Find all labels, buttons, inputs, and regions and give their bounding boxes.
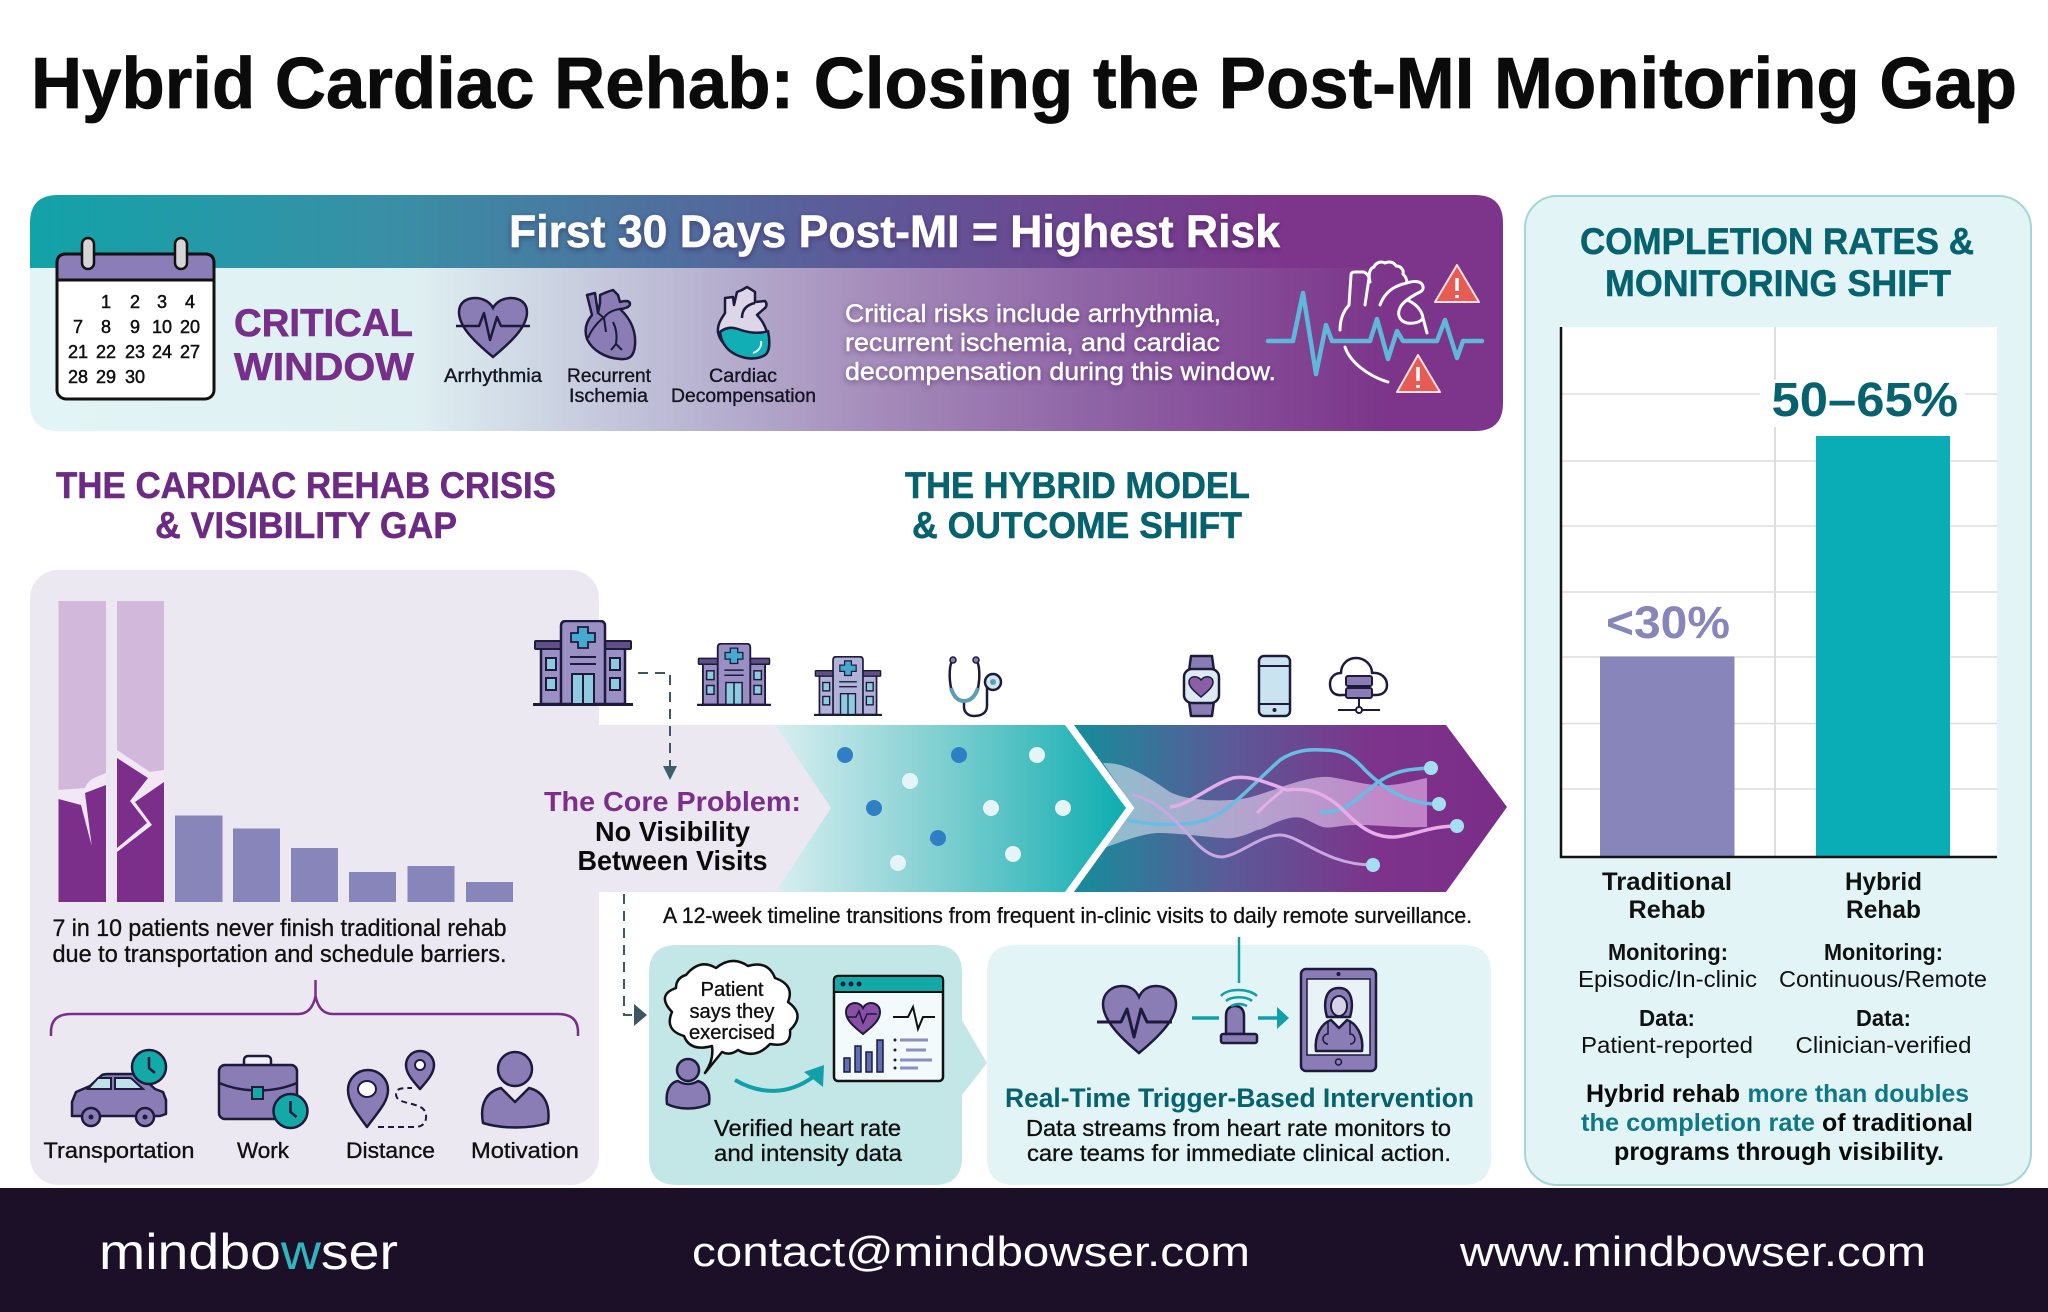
icon: heart monitor <box>1097 986 1176 1053</box>
core problem text: Between Visits <box>578 845 768 876</box>
panel: verified data <box>649 945 987 1185</box>
dashed arrow: core problem to verified data <box>624 894 647 1026</box>
conclusion text: more than doubles <box>1748 1080 1969 1108</box>
critical risks text: recurrent ischemia, and cardiac <box>845 329 1220 357</box>
icon: large hospital <box>533 621 633 704</box>
hybrid rehab column <box>1779 868 1987 1058</box>
bar chart: completion <box>1560 327 1997 857</box>
barrier caption <box>52 915 506 968</box>
hybrid rehab column: Rehab <box>1846 896 1921 924</box>
icon: person motivation <box>482 1052 549 1128</box>
heading: hybrid model: & OUTCOME SHIFT <box>912 505 1242 546</box>
icon: stethoscope <box>950 657 1001 716</box>
footer logo: mindbo wser <box>99 1224 398 1280</box>
critical risks text: decompensation during this window. <box>845 358 1276 386</box>
icon: medium hospital <box>697 644 771 705</box>
icon: recurrent ischemia heart <box>586 290 635 359</box>
icon: calendar: 24 <box>152 342 172 362</box>
labels: cardiac decompensation: Cardiac <box>709 366 777 387</box>
icon: calendar: 8 <box>101 317 111 337</box>
conclusion text: Hybrid rehab <box>1586 1080 1740 1108</box>
hybrid rehab column: Clinician-verified <box>1796 1032 1972 1058</box>
traditional rehab column: Traditional <box>1602 868 1732 896</box>
chevron: lavender core problem <box>595 725 831 892</box>
intervention heading: Real-Time Trigger-Based Intervention <box>1005 1083 1474 1113</box>
traditional rehab column: Episodic/In-clinic <box>1578 966 1757 992</box>
icon: tablet with clinician <box>1301 969 1376 1071</box>
icon: calendar: 4 <box>185 292 195 312</box>
bar chart: dropout <box>58 601 513 902</box>
label: transportation: Transportation <box>44 1138 194 1163</box>
arrow: alarm to tablet <box>1258 1007 1289 1029</box>
completion heading: MONITORING SHIFT <box>1605 263 1951 304</box>
completion heading: COMPLETION RATES & <box>1580 221 1974 262</box>
labels: cardiac decompensation: Decompensation <box>671 386 816 407</box>
dashed arrow: hospital to core problem <box>638 673 677 780</box>
heading: cardiac rehab crisis: & VISIBILITY GAP <box>155 505 457 546</box>
verified caption: and intensity data <box>714 1140 902 1166</box>
icon: calendar: 2 <box>130 292 140 312</box>
icon: calendar: 9 <box>130 317 140 337</box>
title: Hybrid Cardiac Rehab: Closing the Post-MI Monitoring Gap <box>31 44 2017 124</box>
core problem text: The Core Problem: <box>544 786 801 817</box>
chevron: in-clinic dots <box>775 725 1130 892</box>
icon: arrhythmia heart <box>456 298 530 357</box>
footer email: contact@mindbowser.com <box>692 1228 1250 1275</box>
bar chart: completion: 50–65% <box>1772 374 1958 427</box>
icon: patient <box>667 1059 709 1108</box>
speech cloud: says they <box>690 1001 774 1023</box>
speech cloud <box>665 961 798 1073</box>
icon: cloud server <box>1330 658 1387 713</box>
hybrid rehab column: Hybrid <box>1845 868 1922 896</box>
icon: calendar: 10 <box>152 317 172 337</box>
icon: calendar: 1 <box>101 292 111 312</box>
verified caption: Verified heart rate <box>714 1115 901 1141</box>
footer website: www.mindbowser.com <box>1459 1228 1926 1275</box>
verified caption <box>714 1115 902 1166</box>
icon: calendar: 30 <box>125 367 145 387</box>
label: work: Work <box>237 1138 290 1163</box>
label: distance: Distance <box>346 1138 435 1163</box>
label: motivation: Motivation <box>471 1138 579 1163</box>
chevron: continuous data streams <box>1073 725 1507 892</box>
arrow: patient to dashboard <box>735 1065 824 1091</box>
core problem text: No Visibility <box>595 816 750 847</box>
panel: crisis and barriers <box>30 570 599 1185</box>
speech cloud: exercised <box>689 1022 775 1044</box>
critical window heading: WINDOW <box>234 346 414 389</box>
conclusion text: programs through visibility. <box>1614 1138 1944 1166</box>
conclusion text: of traditional <box>1822 1109 1973 1137</box>
hybrid rehab column: Continuous/Remote <box>1779 966 1987 992</box>
speech cloud: Patient <box>700 979 764 1001</box>
timeline caption: A 12-week timeline transitions from frequent in-clinic visits to daily remote surveillance. <box>663 903 1472 928</box>
icon: dashboard <box>834 976 943 1081</box>
barrier caption: 7 in 10 patients never finish traditional rehab <box>52 915 506 942</box>
intervention text <box>1026 1115 1451 1166</box>
heading: hybrid model: THE HYBRID MODEL <box>905 465 1250 506</box>
icon: heart with ECG and warnings <box>1268 262 1482 392</box>
icon: calendar: 20 <box>180 317 200 337</box>
icon: calendar: 3 <box>157 292 167 312</box>
icon: calendar: 28 <box>68 367 88 387</box>
critical risks text <box>845 300 1276 386</box>
icon: calendar: 21 <box>68 342 88 362</box>
icon: calendar <box>57 238 214 399</box>
icon: alarm <box>1221 990 1257 1043</box>
label: arrhythmia: Arrhythmia <box>444 366 542 387</box>
conclusion text <box>1581 1080 1973 1166</box>
icon: calendar: 22 <box>96 342 116 362</box>
critical window heading: CRITICAL <box>234 302 413 345</box>
icon: calendar: 23 <box>125 342 145 362</box>
traditional rehab column: Data: <box>1639 1005 1695 1031</box>
icon: calendar: 29 <box>96 367 116 387</box>
icon: car with clock <box>72 1050 166 1126</box>
icon: phone <box>1259 656 1290 716</box>
banner header: First 30 Days Post-MI = Highest Risk <box>509 206 1281 257</box>
icon: distance pins <box>348 1051 434 1127</box>
bar chart: completion: <30% <box>1606 597 1730 648</box>
conclusion text: the completion rate <box>1581 1109 1815 1137</box>
traditional rehab column: Rehab <box>1628 896 1706 924</box>
arrow: heart to alarm <box>1192 1016 1219 1020</box>
icon: smartwatch <box>1184 656 1219 716</box>
intervention text: care teams for immediate clinical action. <box>1027 1140 1451 1166</box>
traditional rehab column: Patient-reported <box>1581 1032 1753 1058</box>
labels: recurrent ischemia: Recurrent <box>567 366 652 387</box>
hybrid rehab column: Monitoring: <box>1824 939 1943 965</box>
icon: calendar: 7 <box>73 317 83 337</box>
icon: decompensation heart <box>718 287 769 358</box>
traditional rehab column <box>1578 868 1757 1058</box>
icon: briefcase with clock <box>219 1056 308 1128</box>
critical risks text: Critical risks include arrhythmia, <box>845 300 1221 328</box>
icon: small hospital <box>814 657 882 715</box>
footer <box>0 1188 2048 1312</box>
connector line <box>1238 937 1240 983</box>
timeline chevrons <box>595 725 1507 892</box>
barrier caption: due to transportation and schedule barriers. <box>52 941 506 968</box>
labels: recurrent ischemia: Ischemia <box>569 386 648 407</box>
panel: completion rates <box>1525 196 2031 1185</box>
panel: real-time intervention <box>987 937 1491 1185</box>
traditional rehab column: Monitoring: <box>1608 939 1728 965</box>
heading: cardiac rehab crisis: THE CARDIAC REHAB CRISIS <box>56 465 556 506</box>
icon: calendar: 27 <box>180 342 200 362</box>
hybrid rehab column: Data: <box>1856 1005 1911 1031</box>
banner header <box>30 195 1503 268</box>
core problem text <box>544 786 801 876</box>
panel: critical window banner <box>30 195 1503 431</box>
intervention text: Data streams from heart rate monitors to <box>1026 1115 1451 1141</box>
bracket <box>51 980 578 1036</box>
